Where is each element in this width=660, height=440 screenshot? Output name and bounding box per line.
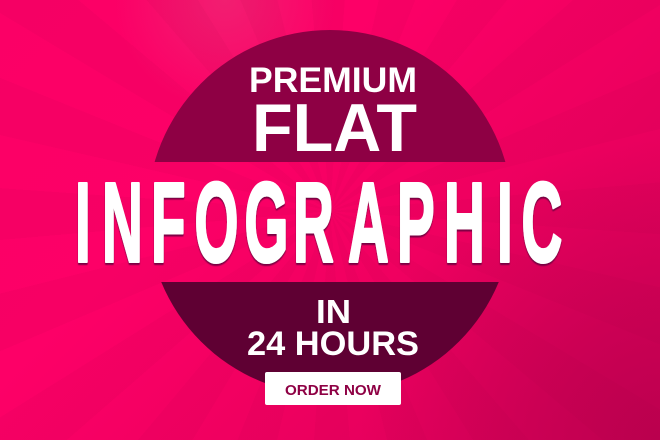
heading: premium: PREMIUM	[249, 61, 417, 100]
heading: infographic: INFOGRAPHIC	[75, 159, 562, 286]
circle: lower segment	[161, 282, 499, 383]
button: order now: ORDER NOW	[285, 383, 381, 399]
text: 24 hours: 24 HOURS	[247, 325, 419, 363]
circle: upper segment	[154, 30, 506, 162]
button: order now	[265, 372, 401, 405]
text: in: IN	[316, 293, 351, 330]
heading: flat: FLAT	[252, 90, 417, 166]
